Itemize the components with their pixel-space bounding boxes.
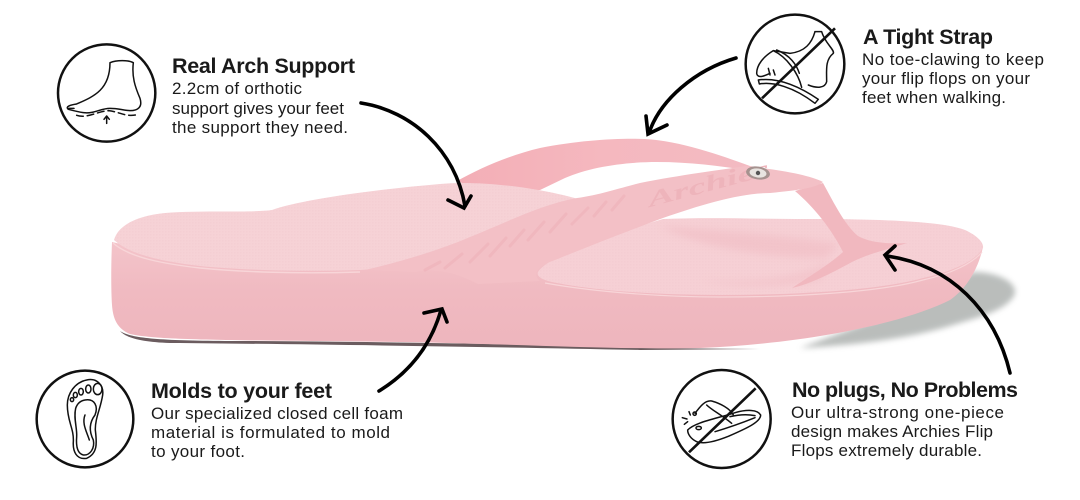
strap emboss wordmark: Archies	[641, 155, 772, 213]
arrow: tight strap	[646, 58, 736, 134]
heading: Molds to your feet: Molds to your feet	[151, 379, 332, 403]
text: tight strap description: your flip flops on your	[862, 69, 1030, 88]
strap emboss pattern	[425, 196, 624, 270]
heel rim highlight	[113, 243, 360, 273]
text: no plugs description: Our ultra-strong one-piece	[791, 403, 1004, 422]
text: molds description: material is formulated to mold	[151, 423, 390, 442]
cast shadow	[800, 272, 1015, 348]
text: arch support description: the support they need.	[172, 118, 348, 137]
text: molds description: to your foot.	[151, 442, 245, 461]
icon: foot imprint	[37, 371, 133, 467]
heading: A Tight Strap: A Tight Strap	[863, 25, 993, 49]
text: tight strap description: feet when walking.	[862, 88, 1006, 107]
text: tight strap description: No toe-clawing to keep	[862, 50, 1044, 69]
arrow: molds to feet	[379, 309, 447, 391]
forefoot footbed	[538, 218, 983, 295]
footbed toe shading	[660, 226, 840, 258]
flip flop product image	[111, 139, 1015, 350]
text: tight strap description	[862, 50, 1044, 107]
icon: no plugs	[673, 370, 771, 468]
toe post	[792, 183, 907, 288]
heading: No plugs, No Problems: No plugs, No Problems	[792, 378, 1018, 402]
text: molds description: Our specialized closed cell foam	[151, 404, 403, 423]
text: molds description	[151, 404, 403, 461]
heel footbed	[114, 183, 578, 271]
text: no plugs description	[791, 403, 1004, 460]
front strap	[365, 166, 823, 284]
text: no plugs description: Flops extremely durable.	[791, 441, 982, 460]
metal stud	[745, 165, 771, 181]
heading: Real Arch Support: Real Arch Support	[172, 54, 355, 78]
far strap	[457, 139, 822, 190]
arrow: no plugs	[885, 246, 1010, 373]
forefoot rim highlight	[545, 252, 982, 297]
text: arch support description: 2.2cm of orthotic	[172, 79, 302, 98]
ground line	[120, 331, 760, 350]
sole side wall	[111, 236, 983, 348]
arrow: arch support	[361, 103, 471, 208]
icon: foot arch	[58, 44, 155, 142]
icon: no toe clawing	[746, 15, 844, 113]
text: arch support description: support gives your feet	[172, 99, 344, 118]
text: no plugs description: design makes Archies Flip	[791, 422, 993, 441]
text: arch support description	[172, 79, 348, 137]
